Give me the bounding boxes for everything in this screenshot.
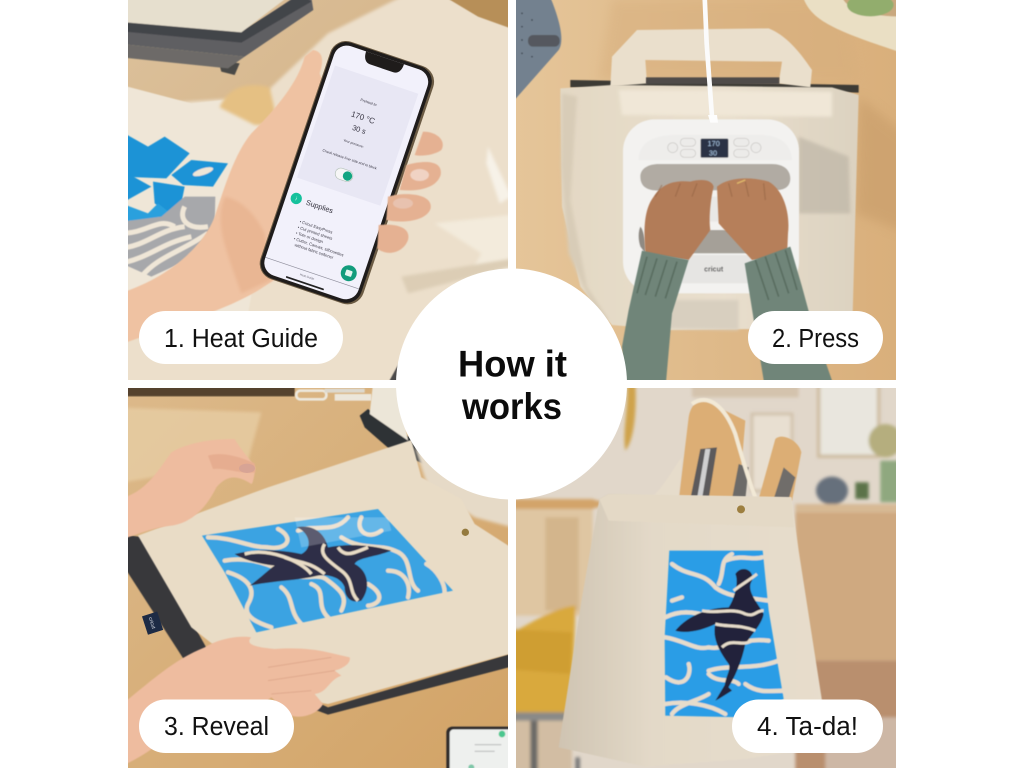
step label 3: 3. Reveal [164, 713, 269, 741]
phone [255, 37, 439, 309]
phone screen text: 30 s [351, 123, 367, 136]
phone toggle [334, 168, 354, 182]
blurred room background [505, 381, 909, 768]
turtle print [202, 509, 453, 632]
panel 3: reveal photo [115, 384, 526, 768]
step label 4: 4. Ta-da! [757, 713, 858, 741]
tote bag body [560, 85, 859, 330]
phone screen text [322, 98, 377, 170]
press handle slot [640, 164, 790, 191]
panel 2: press photo [505, 0, 909, 390]
step label 4 [732, 700, 883, 753]
supplies list: Supplies [305, 198, 335, 215]
upper left hand [118, 439, 255, 541]
supplies list: without fabric softener [294, 242, 335, 260]
supplies list: i [294, 196, 297, 202]
supplies list: • Cutter, Canvas, silhouettes [293, 236, 344, 257]
tote print: blue and grey shapes [121, 132, 228, 277]
phone screen text: Preheat to [360, 98, 377, 107]
tote bag [559, 494, 822, 767]
background linen cloth [128, 0, 508, 380]
turtle silhouette [675, 569, 764, 692]
sideboard [795, 504, 909, 512]
heat press in background [115, 0, 313, 75]
power cable [705, 0, 712, 117]
phone screen text: Your pressure: [343, 138, 364, 149]
panel 1: heat guide photo [128, 0, 508, 380]
turtle silhouette [235, 527, 391, 602]
supplies list: • Cricut EasyPress [299, 219, 333, 235]
step label 2: 2. Press [772, 325, 859, 353]
infographic canvas [128, 0, 896, 768]
step label 2 [748, 311, 883, 364]
step label 1 [139, 311, 343, 364]
plate at top right [804, 0, 896, 52]
yellow chair [505, 606, 575, 717]
press in background [360, 384, 425, 464]
scissors in background [296, 389, 371, 401]
film glare on print [295, 517, 391, 547]
hands on press [645, 178, 788, 260]
title [458, 344, 567, 427]
wooden tools in bag [652, 399, 801, 501]
heat press [623, 119, 799, 293]
film sheet [128, 408, 262, 482]
mat behind tote [570, 80, 859, 93]
knit sleeves [622, 247, 835, 390]
heat press: 30 [709, 148, 717, 157]
supplies list: • Cut printed sheets [297, 225, 333, 241]
hand holding phone [128, 50, 322, 342]
cricut wordmark: cricut [704, 267, 724, 274]
supplies list [290, 192, 344, 259]
press display [701, 139, 728, 158]
iron at top left [516, 0, 562, 99]
panel 4: finished tote photo [505, 381, 909, 768]
mat label: cricut [147, 617, 156, 630]
phone screen text: 170 °C [350, 110, 376, 126]
phone screen text: Check release liner side and to block [322, 148, 377, 171]
phone on table [446, 727, 526, 768]
title: How it [458, 344, 567, 384]
title: works [461, 386, 562, 427]
step label 1: 1. Heat Guide [164, 325, 318, 353]
dark mat [118, 534, 521, 715]
phone: Heat Guide [299, 272, 315, 281]
step label 3 [139, 700, 294, 753]
tote cloth [138, 440, 521, 704]
supplies list: • Tote or design [295, 230, 325, 244]
foreground tote with print [128, 86, 258, 311]
phone round green button [340, 265, 357, 282]
heat press: 170 [708, 139, 720, 148]
table and wall left [505, 499, 609, 509]
press buttons [668, 138, 761, 157]
dark strip at bottom right [389, 364, 398, 380]
mat label [142, 611, 163, 635]
lower left hand [118, 637, 350, 767]
turtle print on tote [665, 551, 784, 717]
center circle [396, 268, 627, 500]
film and tote corner behind [414, 446, 508, 528]
tote handles [610, 28, 812, 87]
fingers [377, 132, 443, 253]
